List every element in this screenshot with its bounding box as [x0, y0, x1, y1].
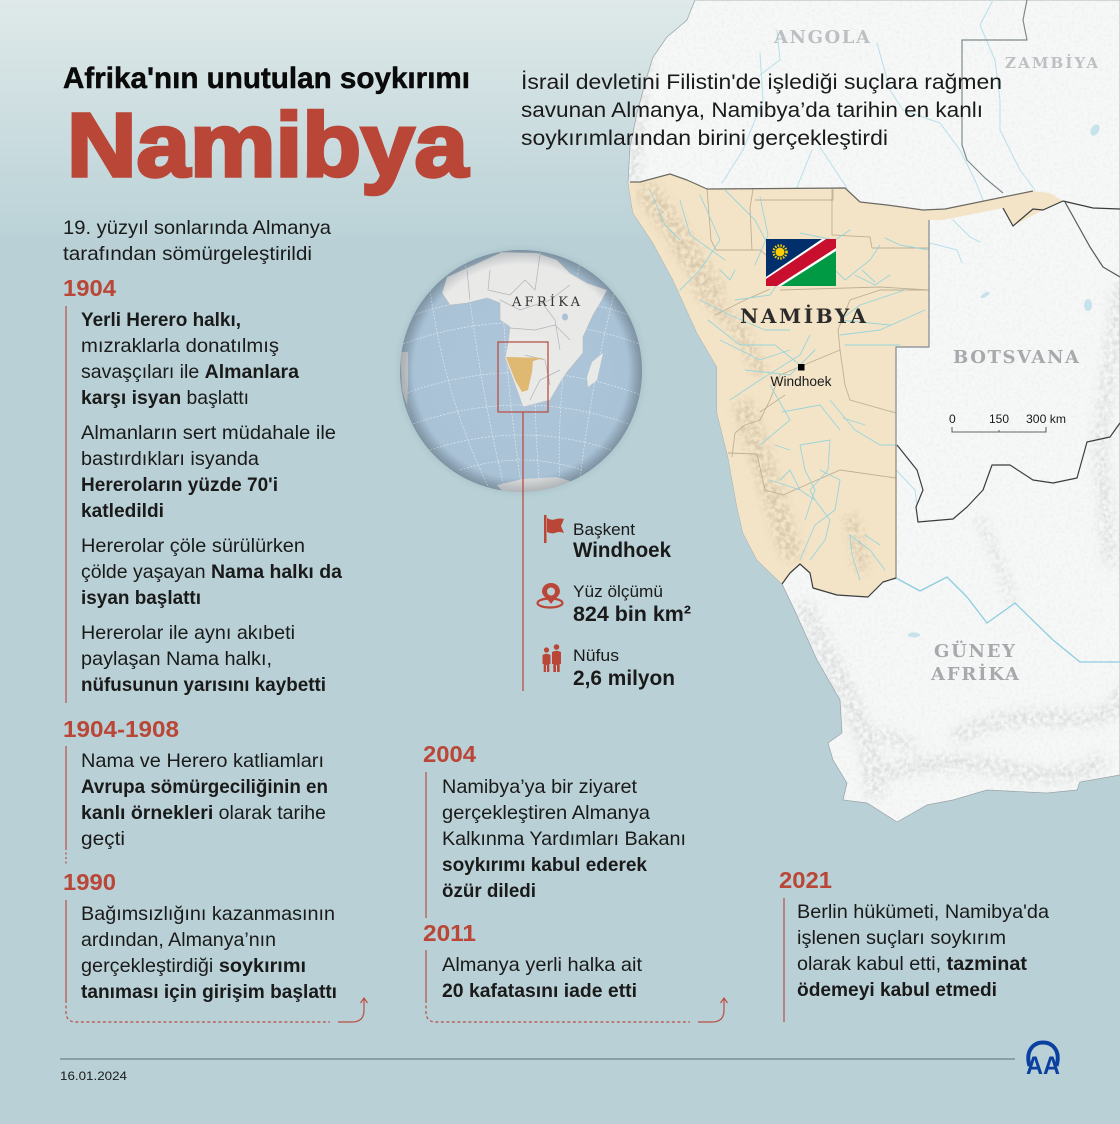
continents on globe [400, 252, 607, 492]
timeline: 1904: 1904 [63, 275, 116, 301]
country borders [630, 0, 1033, 578]
timeline: 2004: özür diledi [442, 880, 536, 902]
timeline: 2011 [423, 920, 643, 1002]
timeline: 1904 [63, 275, 342, 696]
locator globe [397, 247, 645, 691]
timeline: 1904-1908: Avrupa sömürgeciliğinin en [81, 776, 328, 798]
label: Africa: AFRİKA [511, 293, 581, 310]
terrain relief [628, 56, 1120, 803]
timeline: 1904-1908: 1904-1908 [63, 716, 179, 742]
Namibia on globe [506, 357, 544, 392]
timeline: 2004: gerçekleştiren Almanya [442, 802, 650, 824]
timeline: 1990: Bağımsızlığını kazanmasının [81, 903, 335, 925]
timeline: 1904: paylaşan Nama halkı, [81, 648, 272, 670]
timeline: 2021: olarak kabul etti, tazminat [797, 953, 1027, 975]
timeline: 1904: mızraklarla donatılmış [81, 335, 279, 357]
timeline: 2021: 2021 [779, 867, 832, 893]
timeline: 1904-1908 [63, 716, 328, 850]
timeline: 1990: gerçekleştirdiği soykırımı [81, 955, 306, 977]
fact: area: Yüz ölçümü [573, 583, 663, 601]
fact: population: 2,6 milyon [573, 666, 675, 690]
timeline: 2021 [779, 867, 1049, 1001]
timeline: 2004 [423, 741, 686, 902]
timeline: 2011: 2011 [423, 920, 476, 946]
Namibia territory [628, 174, 1063, 597]
footer rule [60, 1058, 1015, 1060]
timeline: 1904: katledildi [81, 500, 164, 522]
label: South Africa: GÜNEY [934, 639, 1016, 662]
Namibia relief and regions [650, 189, 929, 580]
label: Botswana: BOTSVANA [953, 347, 1080, 368]
icon: flag [544, 515, 564, 543]
graticule [400, 252, 642, 490]
scale bar: 150 [989, 412, 1009, 426]
locator box and leader line [498, 342, 548, 691]
intro text: soykırımlarından birini gerçekleştirdi [521, 127, 888, 150]
capital marker: Windhoek [770, 364, 832, 389]
timeline: 1904-1908: kanlı örnekleri olarak tarihe [81, 802, 326, 824]
land mass [628, 0, 1120, 822]
scale bar: 300 km [1026, 412, 1066, 426]
timeline: 1904: isyan başlattı [81, 587, 201, 609]
timeline: 1904: savaşçıları ile Almanlara [81, 361, 299, 383]
flag of Namibia [766, 239, 836, 286]
timeline: 1904: Yerli Herero halkı, [81, 309, 241, 331]
fact: area [538, 583, 691, 626]
lakes [908, 123, 1101, 638]
icon: location pin [538, 583, 562, 608]
label: South Africa: AFRİKA [930, 662, 1020, 685]
main heading: Namibya: Namibya [67, 96, 469, 196]
timeline: 2004: Namibya’ya bir ziyaret [442, 776, 638, 798]
timeline: 1904: karşı isyan başlattı [81, 387, 249, 409]
timeline: 2004: Kalkınma Yardımları Bakanı [442, 828, 686, 850]
intro text: İsrail devletini Filistin'de işlediği suçlara rağmen [521, 71, 1002, 94]
fact: population [542, 644, 675, 690]
label: South Africa [930, 639, 1020, 685]
rivers outside Namibia [722, 0, 1120, 662]
timeline: 1904: çölde yaşayan Nama halkı da [81, 561, 342, 583]
timeline: 1904: Hererolar çöle sürülürken [81, 535, 305, 557]
globe shading [400, 250, 642, 492]
fact: capital: Windhoek [573, 538, 671, 562]
scale bar [949, 412, 1066, 432]
map: southern Africa [628, 0, 1120, 822]
timeline: 1904-1908: Nama ve Herero katliamları [81, 750, 324, 772]
timeline: 1990: ardından, Almanya’nın [81, 929, 276, 951]
logo: AA: AA [1026, 1052, 1060, 1080]
fact: population: Nüfus [573, 647, 619, 665]
timeline: 1990: 1990 [63, 869, 116, 895]
scale bar: 0 [949, 412, 956, 426]
capital marker: Windhoek: Windhoek [770, 374, 832, 389]
subtitle [63, 217, 331, 265]
label: Namibia: NAMİBYA [740, 304, 866, 328]
timeline: 1990: tanıması için girişim başlattı [81, 981, 337, 1003]
timeline: 1904: Hererolar ile aynı akıbeti [81, 622, 295, 644]
subtitle: tarafından sömürgeleştirildi [63, 243, 312, 265]
subtitle: 19. yüzyıl sonlarında Almanya [63, 217, 331, 239]
date: 16.01.2024 [60, 1069, 127, 1083]
timeline: 1904: Almanların sert müdahale ile [81, 422, 336, 444]
timeline: 2011: 20 kafatasını iade etti [442, 980, 637, 1002]
fact: capital [544, 515, 671, 562]
timeline: 2011: Almanya yerli halka ait [442, 954, 643, 976]
title [63, 62, 470, 196]
timeline: 1904: bastırdıkları isyanda [81, 448, 259, 470]
fact: capital: Başkent [573, 521, 635, 539]
timeline: 1904: Hereroların yüzde 70'i [81, 474, 278, 496]
timeline connectors [66, 306, 784, 1022]
timeline: 2004: soykırımı kabul ederek [442, 854, 647, 876]
intro text: savunan Almanya, Namibya’da tarihin en kanlı [521, 99, 983, 122]
label: Zambia: ZAMBİYA [1005, 53, 1098, 72]
timeline: 2021: ödemeyi kabul etmedi [797, 979, 997, 1001]
intro text [521, 71, 1002, 150]
fact: area: 824 bin km² [573, 602, 691, 626]
timeline: 2021: Berlin hükümeti, Namibya'da [797, 901, 1049, 923]
timeline: 1990 [63, 869, 337, 1003]
label: Angola: ANGOLA [773, 27, 871, 48]
icon: people [542, 644, 561, 672]
timeline: 2021: işlenen suçları soykırım [797, 927, 1006, 949]
timeline: 1904: nüfusunun yarısını kaybetti [81, 674, 326, 696]
timeline: 1904-1908: geçti [81, 828, 125, 850]
timeline: 2004: 2004 [423, 741, 476, 767]
title: Afrika'nın unutulan soykırımı [63, 62, 470, 95]
